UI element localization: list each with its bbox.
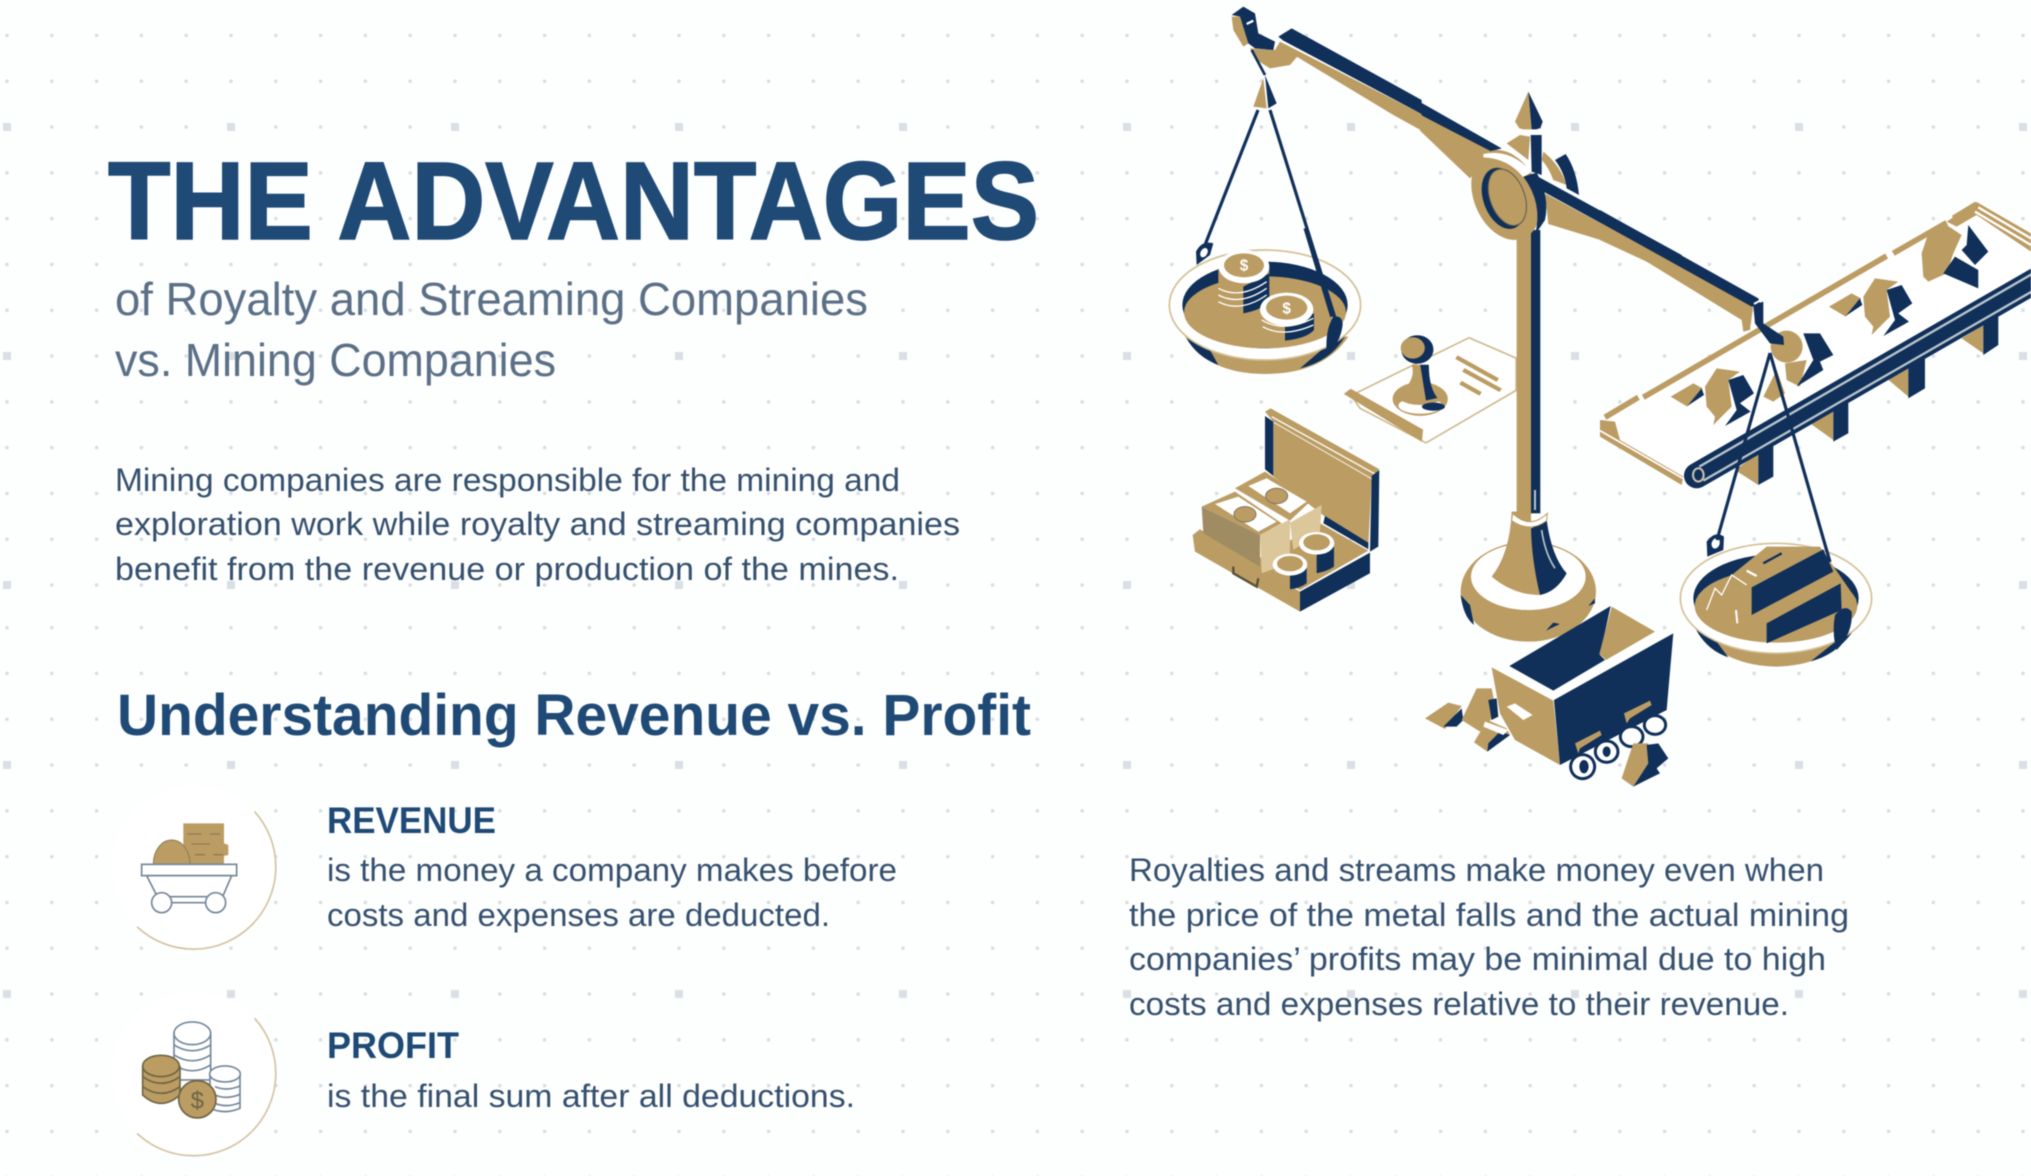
profit label and definition: PROFIT bbox=[327, 1025, 459, 1066]
icon: revenue mine cart bbox=[112, 785, 276, 949]
revenue label and definition: costs and expenses are deducted. bbox=[327, 897, 830, 933]
revenue label and definition: REVENUE bbox=[327, 800, 496, 841]
subtitle bbox=[115, 273, 868, 386]
document and stamp bbox=[1344, 335, 1516, 443]
balance beam: centre pivot bbox=[1420, 92, 1682, 280]
right pan suspension strings bbox=[1717, 353, 1830, 562]
right paragraph: Royalties and streams make money even when bbox=[1129, 852, 1824, 888]
icon: profit coin stacks bbox=[112, 992, 276, 1156]
briefcase with cash bbox=[1193, 408, 1379, 612]
profit label and definition: is the final sum after all deductions. bbox=[327, 1078, 855, 1114]
conveyor belt with ore bbox=[1600, 201, 2031, 485]
left pan with coins: $ bbox=[1282, 300, 1291, 317]
balance beam: left hook bbox=[1232, 7, 1422, 131]
section heading: Understanding Revenue vs. Profit bbox=[117, 683, 1031, 748]
scale base and column bbox=[1461, 230, 1596, 642]
right paragraph: costs and expenses relative to their revenue. bbox=[1129, 986, 1789, 1022]
left pan with coins: $ bbox=[1240, 258, 1249, 275]
revenue label and definition bbox=[327, 800, 897, 933]
intro paragraph: exploration work while royalty and streaming companies bbox=[115, 506, 960, 542]
left pan with coins bbox=[1169, 228, 1361, 374]
icon: profit coin stacks: $ bbox=[191, 1087, 204, 1114]
right pan with gold bars bbox=[1680, 534, 1872, 667]
subtitle: vs. Mining Companies bbox=[115, 334, 556, 386]
intro paragraph: benefit from the revenue or production of the mines. bbox=[115, 551, 899, 587]
right paragraph: companies’ profits may be minimal due to high bbox=[1129, 941, 1826, 977]
balance beam: right arm and hook bbox=[1600, 210, 1803, 363]
right paragraph bbox=[1129, 852, 1849, 1022]
revenue label and definition: is the money a company makes before bbox=[327, 852, 897, 888]
intro paragraph: Mining companies are responsible for the mining and bbox=[115, 462, 900, 498]
left pan suspension strings bbox=[1205, 110, 1335, 318]
right paragraph: the price of the metal falls and the actual mining bbox=[1129, 897, 1849, 933]
intro paragraph bbox=[115, 462, 960, 587]
profit label and definition bbox=[327, 1025, 855, 1114]
mine cart with ore bbox=[1425, 606, 1673, 787]
subtitle: of Royalty and Streaming Companies bbox=[115, 273, 868, 325]
title: THE ADVANTAGES bbox=[108, 140, 1039, 263]
illustration: scales, conveyor, briefcase, cart bbox=[1169, 7, 2031, 787]
